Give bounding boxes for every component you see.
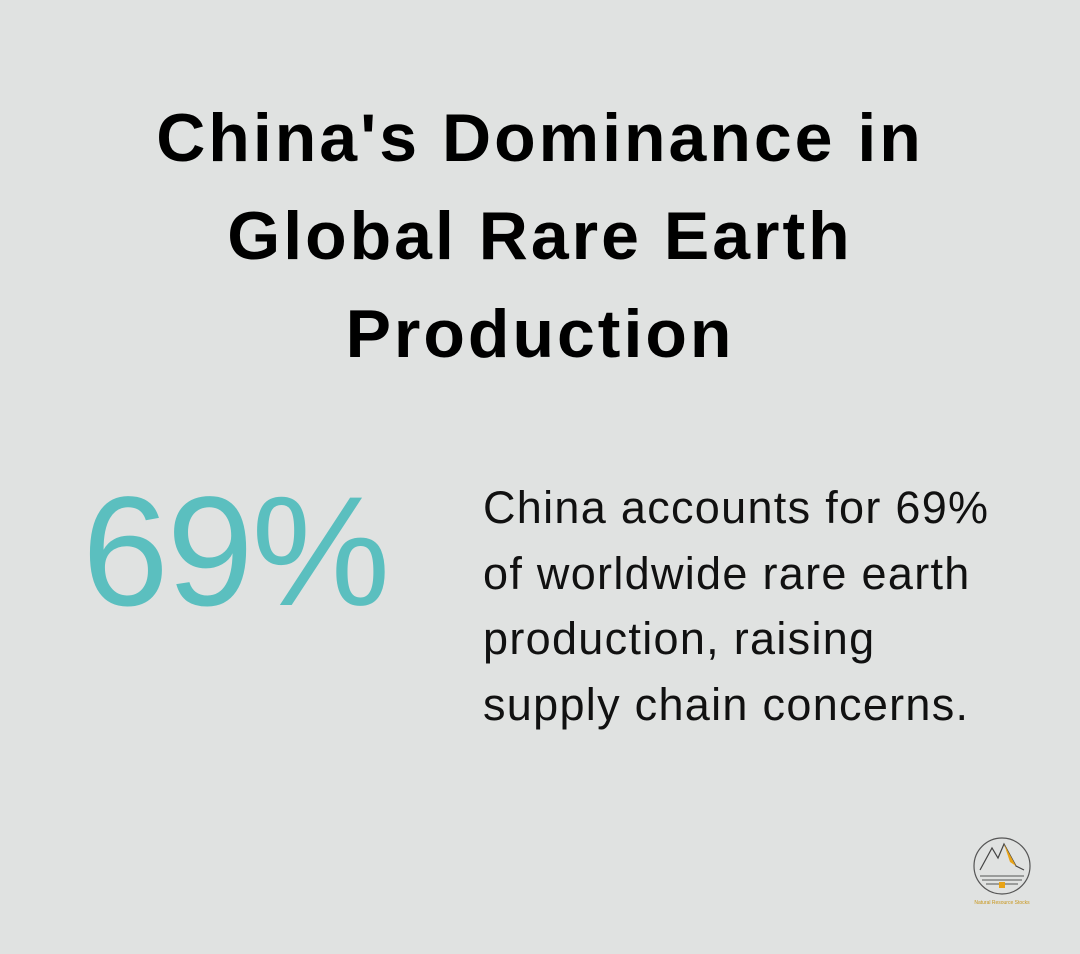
title xyxy=(156,100,924,372)
description text: production, raising xyxy=(483,613,875,664)
title: Production xyxy=(346,296,734,372)
title: Global Rare Earth xyxy=(227,198,853,274)
description text: supply chain concerns. xyxy=(483,678,969,730)
logo xyxy=(973,837,1031,906)
description text: China accounts for 69% xyxy=(483,482,989,533)
description text xyxy=(483,482,989,730)
title: China's Dominance in xyxy=(156,100,924,176)
logo: Natural Resource Stocks xyxy=(974,900,1030,906)
description text: of worldwide rare earth xyxy=(483,548,971,598)
big stat: 69% xyxy=(82,465,388,639)
